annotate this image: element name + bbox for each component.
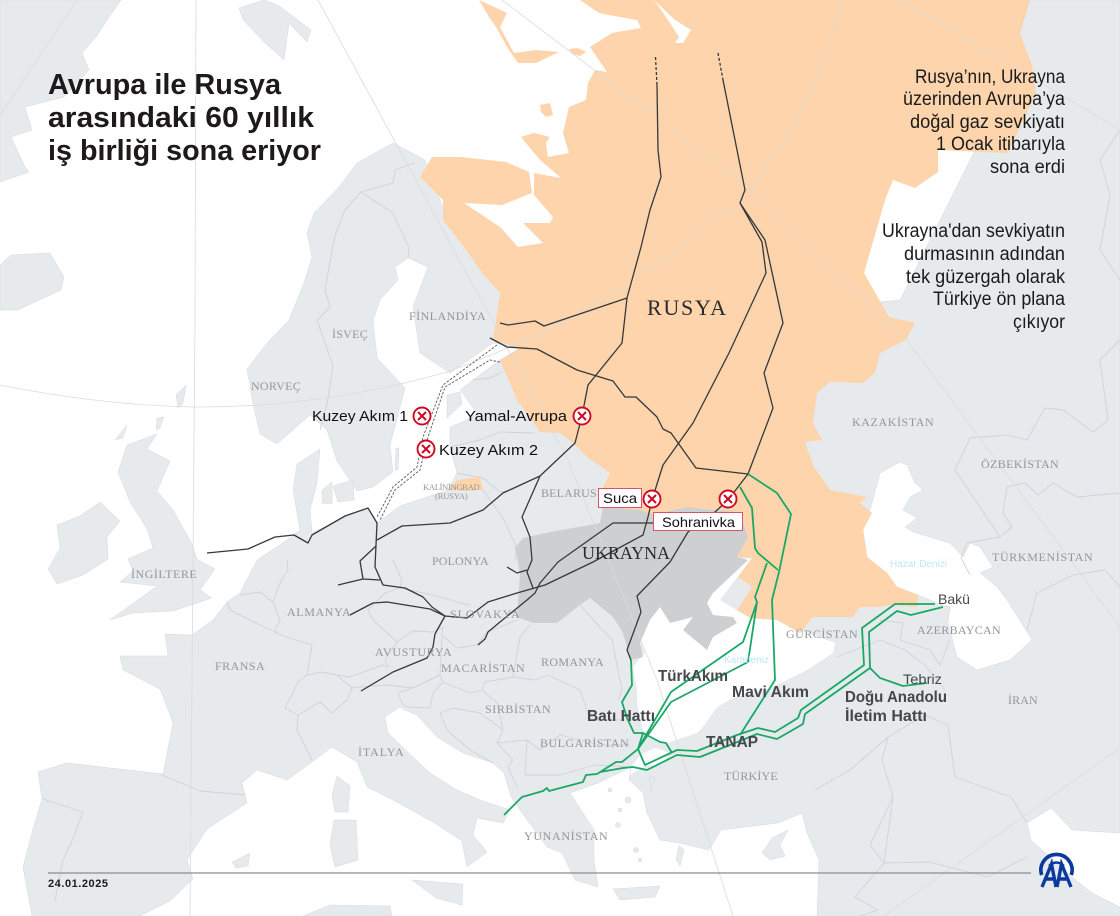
marker: Kuzey Akım 2 <box>418 440 538 459</box>
pipeline labels: TANAP <box>706 734 758 751</box>
sea labels: Hazar Denizi <box>890 559 947 570</box>
country labels: BELARUS <box>541 486 597 500</box>
title: arasındaki 60 yıllık <box>48 102 315 134</box>
pipelines: Nord Stream (dashed) <box>377 345 500 520</box>
city labels <box>903 591 970 687</box>
country labels: ÖZBEKİSTAN <box>981 457 1059 471</box>
country labels: SIRBİSTAN <box>485 702 551 716</box>
country labels: İRAN <box>1008 693 1038 707</box>
country labels: BULGARİSTAN <box>540 736 629 750</box>
text block: Türkiye route: Türkiye ön plana <box>933 289 1065 310</box>
country labels: İTALYA <box>358 745 404 759</box>
pipeline labels: Batı Hattı <box>587 708 655 725</box>
country labels: İNGİLTERE <box>131 567 197 581</box>
country labels: GÜRCİSTAN <box>786 627 858 641</box>
text block: shipment ended: 1 Ocak itibarıyla <box>936 134 1065 155</box>
text block: shipment ended <box>903 67 1065 178</box>
country labels: KAZAKİSTAN <box>852 415 934 429</box>
text block: shipment ended: sona erdi <box>990 157 1065 178</box>
marker: Sohranivka <box>654 490 742 530</box>
pipelines: southern corridor (green) <box>504 474 943 815</box>
marker: Kuzey Akım 1: Kuzey Akım 1 <box>312 408 408 425</box>
title: Avrupa ile Rusya <box>48 69 282 101</box>
logo: AA <box>1041 854 1072 887</box>
footer rule <box>48 872 1031 874</box>
sea labels <box>724 559 947 666</box>
country labels: İSVEÇ <box>332 327 368 341</box>
country labels: MACARİSTAN <box>441 661 525 675</box>
pipeline labels: Mavi Akım <box>732 684 809 701</box>
country labels: TÜRKİYE <box>724 769 778 783</box>
country labels: SLOVAKYA <box>450 607 520 621</box>
inlet: Gulf of Ob <box>654 0 691 43</box>
region: Russia <box>420 0 1036 633</box>
pipeline labels: TürkAkım <box>658 668 728 685</box>
date: 24.01.2025 <box>48 878 108 890</box>
city labels: Bakü <box>938 591 970 607</box>
pipeline labels <box>587 668 947 751</box>
country labels: KALİNİNGRAD <box>423 482 480 492</box>
text block: Türkiye route: durmasının adından <box>904 244 1065 265</box>
label: Ukraine: UKRAYNA <box>582 543 670 563</box>
pipeline labels: İletim Hattı <box>845 707 927 725</box>
city labels: Tebriz <box>903 671 942 687</box>
text block: shipment ended: doğal gaz sevkiyatı <box>910 112 1065 133</box>
country labels: (RUSYA) <box>435 491 468 501</box>
country labels: AVUSTURYA <box>375 645 452 659</box>
marker: Kuzey Akım 2: Kuzey Akım 2 <box>439 442 538 459</box>
text block: Türkiye route: çıkıyor <box>1013 312 1066 333</box>
text block: Türkiye route: Ukrayna'dan sevkiyatın <box>882 221 1065 242</box>
country labels: FRANSA <box>215 659 265 673</box>
text block: Türkiye route <box>882 221 1066 333</box>
label: Russia: RUSYA <box>647 295 726 320</box>
marker: Suca: Suca <box>603 490 637 506</box>
country labels <box>131 309 1093 843</box>
text block: shipment ended: üzerinden Avrupa’ya <box>903 89 1065 110</box>
title: iş birliği sona eriyor <box>48 135 321 167</box>
region: Ukraine <box>515 507 748 660</box>
country labels: YUNANİSTAN <box>524 829 608 843</box>
marker: Suca <box>598 488 660 508</box>
country labels: TÜRKMENİSTAN <box>992 550 1093 564</box>
country labels: FİNLANDİYA <box>409 309 486 323</box>
country labels: NORVEÇ <box>251 379 301 393</box>
pipelines: Russian network to Europe (black) <box>207 53 783 691</box>
country labels: ALMANYA <box>287 605 351 619</box>
sea labels: Karadeniz <box>724 655 769 666</box>
sea: Black Sea and Marmara <box>630 558 835 775</box>
marker: Yamal-Avrupa: Yamal-Avrupa <box>465 408 568 425</box>
country labels: POLONYA <box>432 554 489 568</box>
title <box>48 69 321 167</box>
sea: Caspian <box>863 462 1032 670</box>
country labels: AZERBAYCAN <box>917 623 1001 637</box>
marker: Sohranivka: Sohranivka <box>662 514 735 530</box>
pipeline labels: Doğu Anadolu <box>845 689 947 706</box>
country labels: ROMANYA <box>541 655 604 669</box>
text block: shipment ended: Rusya’nın, Ukrayna <box>915 67 1065 88</box>
text block: Türkiye route: tek güzergah olarak <box>906 267 1065 288</box>
